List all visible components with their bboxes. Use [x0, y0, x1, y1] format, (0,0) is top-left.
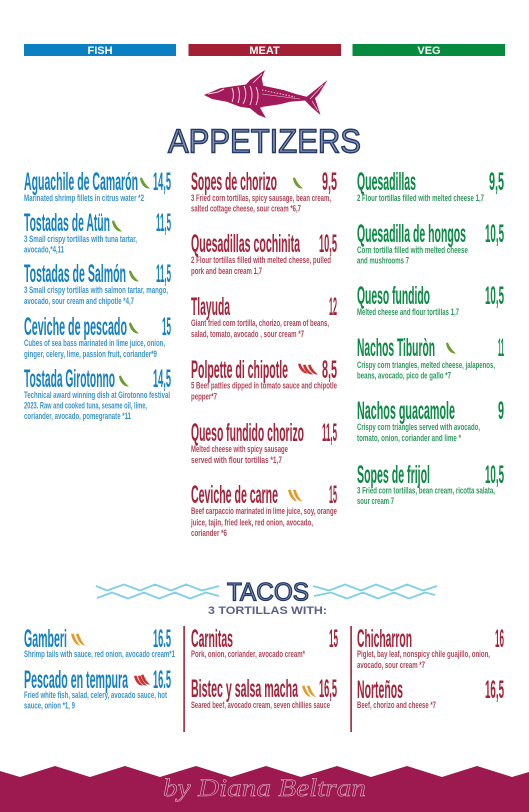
item: Tlayuda — [191, 293, 337, 340]
text: 14,5 — [153, 168, 171, 196]
item: Tostada Girotonno: 2023. Raw and cooked tuna, sesame oil, lime, — [24, 400, 147, 412]
item: Quesadillas: Quesadillas — [357, 168, 416, 196]
text: 8,5 — [322, 356, 337, 384]
item: Quesadillas cochinita: 2 Flour tortillas filled with melted cheese, pulled — [191, 255, 331, 266]
text: 16,5 — [319, 675, 337, 703]
panel: veg column — [357, 168, 504, 507]
category bar: fish — [24, 44, 176, 57]
item: Tlayuda: Giant fried corn tortilla, chorizo, cream of beans, — [191, 318, 329, 329]
item: Aguachile de Camarón: Aguachile de Camarón — [24, 168, 138, 196]
panel: tacos fish — [24, 625, 175, 712]
item: Queso fundido chorizo: Queso fundido chorizo — [191, 419, 304, 447]
item: Sopes de frijol — [357, 461, 504, 507]
item: Quesadilla de hongos: Corn tortilla filled with melted cheese — [357, 245, 468, 256]
subheading: 3 tortillas with: 3 TORTILLAS WITH: — [208, 605, 327, 617]
item: Queso fundido chorizo: served with flour tortillas *1,7 — [191, 455, 282, 466]
item: Tostadas de Atün: avocado,*4,11 — [24, 244, 64, 256]
item: Carnitas: Pork, onion, coriander, avocado cream* — [191, 649, 305, 660]
heading: tacos: TACOS — [227, 578, 309, 606]
item: Tostada Girotonno: Technical award winning dish at Girotonno festival — [24, 390, 170, 401]
text: 15 — [162, 313, 171, 341]
item: Tostadas de Atün: Tostadas de Atün — [24, 209, 110, 237]
item: Quesadilla de hongos — [357, 220, 504, 266]
item: Ceviche de pescado: Cubes of sea bass marinated in lime juice, onion, — [24, 338, 165, 349]
text: 15 — [329, 481, 337, 509]
item: Nachos guacamole: tomato, onion, coriander and lime * — [357, 433, 461, 444]
item: Polpette di chipotle — [191, 356, 337, 402]
item: Chicharron: avocado, sour cream *7 — [357, 660, 425, 671]
item: Bistec y salsa macha: Bistec y salsa macha — [191, 675, 298, 703]
item: Quesadillas cochinita: Quesadillas cochinita — [191, 230, 300, 258]
item: Quesadilla de hongos: and mushrooms 7 — [357, 256, 409, 266]
category bar: meat — [188, 44, 341, 57]
item: Ceviche de pescado: ginger, celery, lime, passion fruit, coriander*9 — [24, 349, 157, 360]
item: Tostadas de Salmón: avocado, sour cream and chipotle *4,7 — [24, 296, 134, 307]
category bar: meat: MEAT — [249, 45, 280, 57]
panel: tacos pork — [357, 625, 504, 711]
item: Queso fundido — [357, 282, 504, 318]
item: Ceviche de carne — [190, 481, 337, 539]
item: Queso fundido chorizo — [191, 419, 337, 466]
item: Chicharron — [357, 625, 504, 671]
item: Nachos guacamole — [357, 397, 504, 444]
item: Ceviche de carne: Ceviche de carne — [191, 481, 278, 509]
text: 12 — [329, 293, 337, 321]
item: Tostadas de Atün: 3 Small crispy tortillas with tuna tartar, — [24, 234, 137, 245]
item: Ceviche de pescado — [24, 313, 171, 360]
item: Polpette di chipotle: Polpette di chipotle — [191, 356, 288, 384]
panel: tacos meat — [191, 625, 338, 711]
text: 11,5 — [322, 419, 337, 447]
item: Ceviche de carne: juice, tajin, fried leek, red onion, avocado, — [190, 518, 313, 528]
item: Tlayuda: Tlayuda — [191, 293, 230, 321]
item: Sopes de chorizo: salted cottage cheese, sour cream *6,7 — [191, 204, 301, 214]
item: Quesadillas cochinita — [191, 230, 337, 277]
category bar: veg — [352, 44, 505, 57]
item: Sopes de chorizo: 3 Fried corn tortillas, spicy sausage, bean cream, — [191, 193, 331, 204]
item: Polpette di chipotle: 5 Beef patties dipped in tomato sauce and chipotle — [191, 380, 337, 392]
item: Ceviche de carne: coriander *6 — [191, 528, 227, 539]
item: Norteños: Beef, chorizo and cheese *7 — [357, 700, 436, 711]
item: Aguachile de Camarón: Marinated shrimp fillets in citrus water *2 — [24, 193, 144, 204]
decoration: left waves — [96, 584, 219, 598]
text: 11,5 — [156, 209, 171, 237]
panel: fish column — [24, 168, 171, 422]
item: Tostadas de Salmón — [24, 260, 171, 307]
category bar: fish: FISH — [87, 45, 113, 57]
decoration: right waves — [313, 584, 437, 598]
item: Aguachile de Camarón — [24, 168, 171, 204]
item: Tostada Girotonno: Tostada Girotonno — [24, 365, 115, 393]
text: 16.5 — [153, 625, 171, 653]
item: Tostada Girotonno — [24, 365, 171, 422]
item: Sopes de chorizo — [191, 168, 337, 214]
item: Norteños — [357, 676, 504, 711]
item: Tostadas de Salmón: 3 Small crispy tortillas with salmon tartar, mango, — [24, 285, 168, 296]
category bar: veg: VEG — [417, 45, 441, 57]
item: Ceviche de pescado: Ceviche de pescado — [24, 313, 127, 341]
item: Pescado en tempura: Pescado en tempura — [24, 666, 128, 694]
panel: meat column — [190, 168, 337, 539]
item: Polpette di chipotle: pepper*7 — [191, 392, 217, 402]
text: 11 — [498, 334, 504, 362]
item: Carnitas — [191, 625, 338, 660]
item: Carnitas: Carnitas — [191, 625, 233, 653]
item: Pescado en tempura — [24, 666, 171, 712]
item: Sopes de frijol: sour cream 7 — [357, 496, 394, 507]
item: Pescado en tempura: Fried white fish, salad, celery, avocado sauce, hot — [24, 690, 168, 701]
text: 10,5 — [319, 230, 337, 258]
item: Tostadas de Salmón: Tostadas de Salmón — [24, 260, 126, 288]
item: Ceviche de carne: Beef carpaccio marinated in lime juice, soy, orange — [191, 506, 337, 517]
item: Chicharron: Chicharron — [357, 625, 412, 653]
icon: shark logo — [204, 70, 328, 118]
item: Queso fundido chorizo: Melted cheese with spicy sausage — [191, 444, 288, 455]
item: Queso fundido: Queso fundido — [357, 282, 430, 310]
item: Tostadas de Atün — [24, 209, 171, 256]
heading: appetizers: APPETIZERS — [168, 124, 361, 160]
text: 9,5 — [489, 168, 504, 196]
item: Bistec y salsa macha: Seared beef, avocado cream, seven chillies sauce — [191, 700, 330, 711]
text: 15 — [329, 625, 338, 653]
item: Nachos Tiburòn — [357, 334, 504, 382]
text: 9 — [498, 397, 504, 425]
item: Pescado en tempura: sauce, onion *1, 9 — [24, 700, 75, 712]
item: Sopes de chorizo: Sopes de chorizo — [191, 168, 277, 196]
text: 16.5 — [153, 666, 171, 694]
text: 9,5 — [322, 168, 337, 196]
footer band — [0, 766, 529, 812]
item: Nachos Tiburòn: beans, avocado, pico de gallo *7 — [357, 370, 451, 382]
item: Tlayuda: salad, tomato, avocado , sour cream *7 — [191, 329, 304, 340]
signature: by Diana Beltran — [163, 775, 366, 802]
text: 16 — [495, 625, 504, 653]
text: 14,5 — [153, 365, 171, 393]
item: Sopes de frijol: Sopes de frijol — [357, 461, 430, 489]
item: Gamberi: Shrimp tails with sauce, red onion, avocado cream*1 — [24, 649, 175, 660]
item: Bistec y salsa macha — [191, 675, 337, 711]
divider: tacos left — [183, 626, 185, 732]
item: Gamberi — [24, 625, 175, 660]
item: Gamberi: Gamberi — [24, 625, 67, 653]
text: 11,5 — [156, 260, 171, 288]
item: Norteños: Norteños — [357, 676, 403, 704]
item: Queso fundido: Melted cheese and flour tortillas 1,7 — [357, 307, 459, 318]
item: Tostada Girotonno: coriander, avocado, pomegranate *11 — [24, 411, 131, 422]
item: Quesadillas cochinita: pork and bean cream 1,7 — [191, 266, 262, 277]
divider: tacos right — [350, 626, 352, 732]
